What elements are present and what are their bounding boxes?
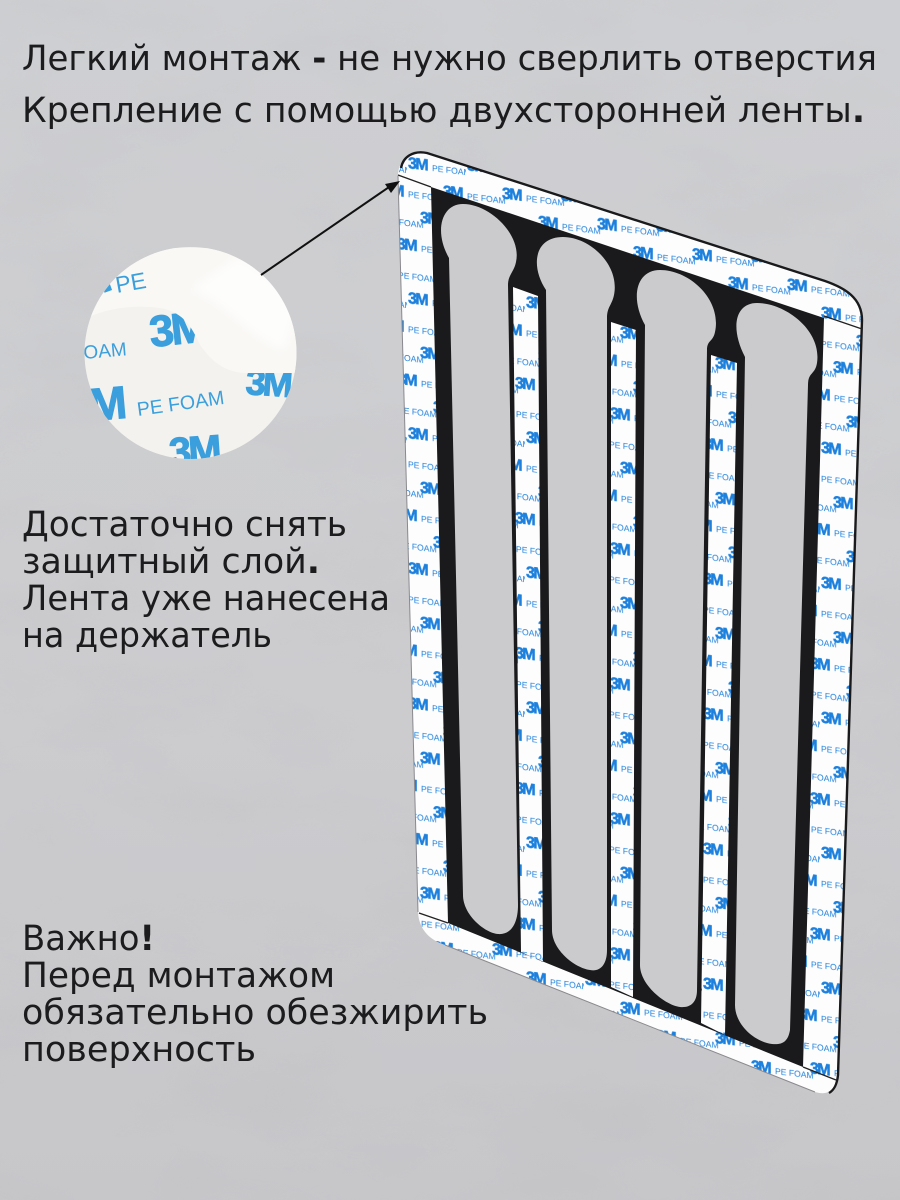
heading: Крепление с помощью двухсторонней ленты. — [22, 91, 865, 131]
close-up labels: 3M — [147, 302, 207, 357]
text block: important note: поверхность — [22, 1030, 256, 1070]
heading — [22, 39, 877, 131]
close-up labels: M — [86, 376, 127, 431]
close-up labels — [84, 313, 292, 459]
text block: important note: Важно! — [22, 919, 155, 959]
text block: peel the layer — [22, 505, 390, 656]
tape fold lines — [398, 175, 862, 1080]
text block: important note — [22, 919, 488, 1070]
peeled film — [84, 248, 300, 373]
panel: tape holder back — [398, 152, 862, 1093]
close-up labels: OAM — [83, 339, 128, 364]
holder outer edge — [401, 152, 862, 1093]
close-up labels: 3M — [244, 361, 292, 405]
callout: close-up of peeling tape film — [83, 247, 300, 475]
text block: peel the layer: Достаточно снять — [22, 505, 347, 545]
close-up labels: PE FOAM — [136, 387, 226, 421]
left edge shadow — [398, 176, 815, 1092]
heading: Легкий монтаж - не нужно сверлить отверстия — [22, 39, 877, 79]
black holder frame — [431, 187, 824, 1067]
callout: close-up of peeling tape film: PE — [113, 267, 148, 298]
text block: peel the layer: защитный слой. — [22, 542, 320, 582]
text block: important note: обязательно обезжирить — [22, 993, 488, 1033]
text block: peel the layer: Лента уже нанесена — [22, 579, 390, 619]
white tape layer — [398, 152, 862, 1093]
slots showing the wall — [441, 204, 817, 1044]
3M PE FOAM print — [398, 152, 862, 1093]
close-up labels: 3M — [168, 428, 221, 475]
text block: peel the layer: на держатель — [22, 616, 272, 656]
arrow from close-up to holder corner — [261, 181, 400, 275]
text block: important note: Перед монтажом — [22, 956, 335, 996]
